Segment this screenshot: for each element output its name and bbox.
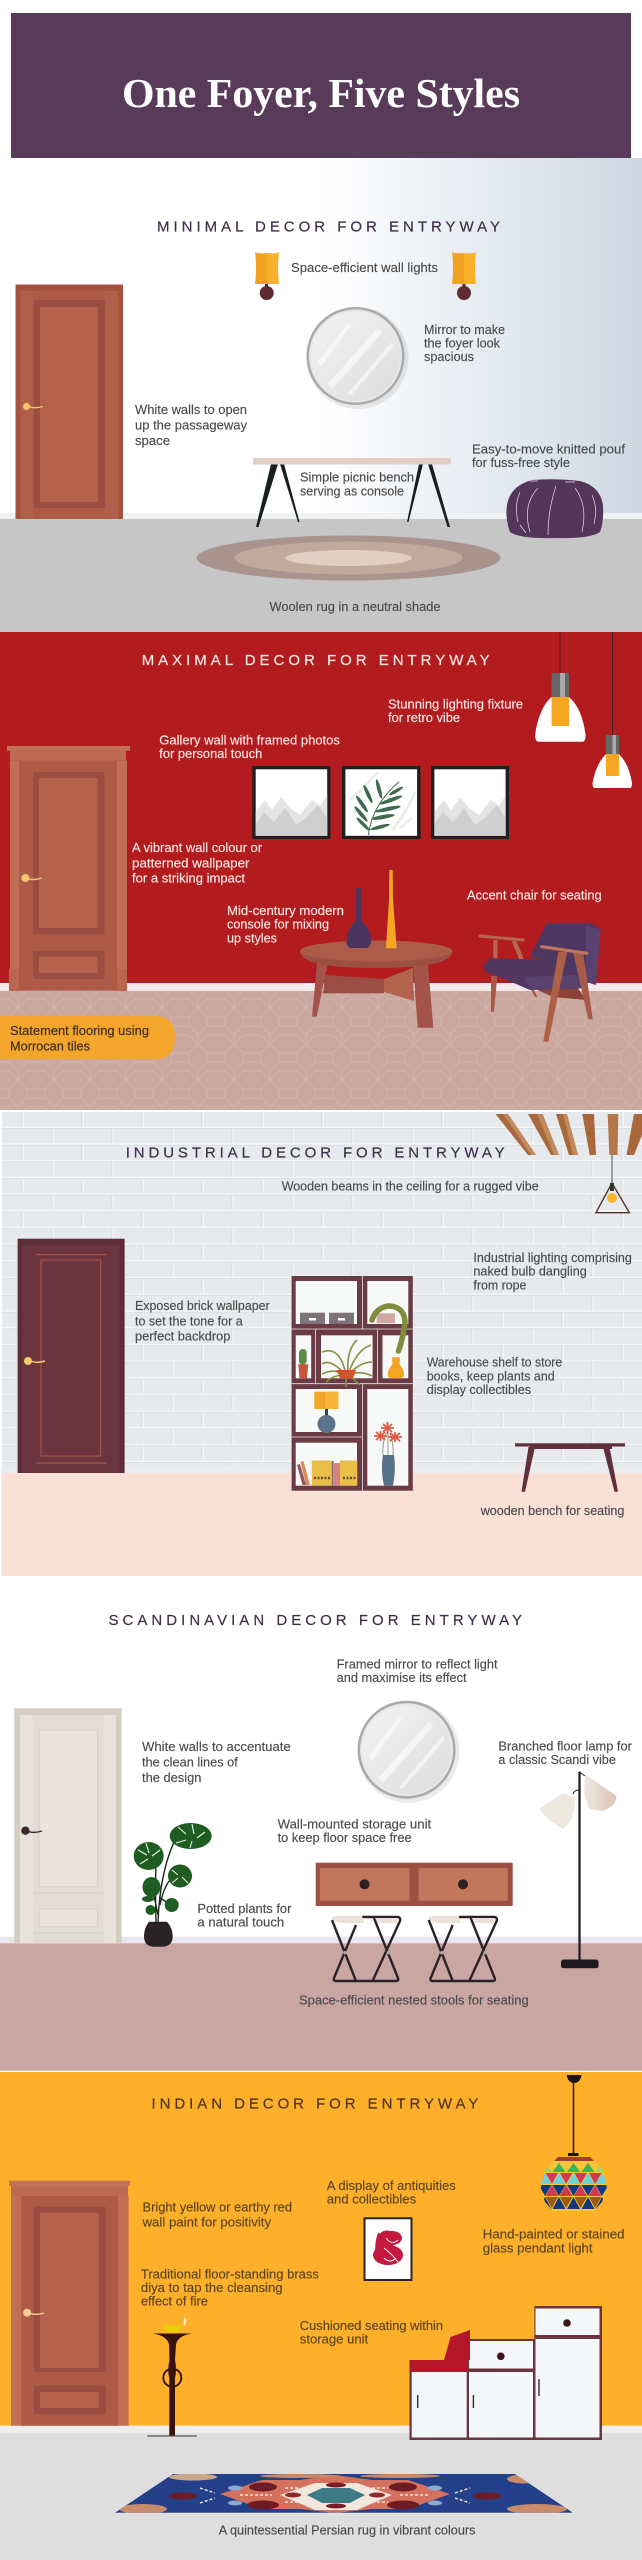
- text: industrial lighting: [473, 1250, 632, 1292]
- text: lighting: for retro vibe: [388, 710, 460, 725]
- indian wall and floor: [0, 2072, 642, 2560]
- text: industrial lighting: from rope: [473, 1277, 526, 1292]
- text: seating: [300, 2318, 443, 2347]
- table: mid-century console: [300, 940, 453, 1028]
- text: white walls: space: [135, 433, 170, 448]
- cushion: [410, 2330, 470, 2372]
- heading: maximal: MAXIMAL DECOR FOR ENTRYWAY: [142, 652, 490, 669]
- heading: indian: INDIAN DECOR FOR ENTRYWAY: [152, 2095, 478, 2112]
- callout: statement flooring: Statement flooring using: [10, 1023, 149, 1038]
- callout: statement flooring: [0, 1016, 175, 1059]
- text: pouf: Easy-to-move knitted pouf: [472, 442, 625, 456]
- heading: minimal: MINIMAL DECOR FOR ENTRYWAY: [157, 218, 500, 236]
- wooden bench: [515, 1443, 625, 1492]
- text: storage unit: to keep floor space free: [278, 1830, 412, 1845]
- orange vase: [388, 1357, 404, 1378]
- heading: scandinavian: SCANDINAVIAN DECOR FOR ENTRYWAY: [108, 1612, 522, 1629]
- floor lamp: [540, 1772, 616, 1968]
- text: white walls: White walls to open: [135, 402, 247, 417]
- text: warehouse shelf: Warehouse shelf to store: [427, 1355, 562, 1370]
- panel: indian decor: [0, 2072, 642, 2560]
- rug: neutral: [196, 536, 500, 580]
- chair: accent: [480, 923, 601, 1042]
- maximal wall and floor: [0, 632, 642, 1110]
- text: warehouse shelf: [427, 1355, 562, 1397]
- table lamp: [314, 1392, 338, 1433]
- gallery frame 2 with leaf: [342, 766, 420, 839]
- door: maximal: [7, 746, 130, 991]
- text: stools: Space-efficient nested stools for seating: [299, 1993, 529, 2008]
- text: potted plants: Potted plants for: [197, 1901, 292, 1916]
- text: potted plants: [197, 1901, 292, 1930]
- text: console: [227, 903, 344, 945]
- wooden beams: [496, 1114, 642, 1155]
- text: floor lamp: Branched floor lamp for: [498, 1738, 633, 1753]
- text: potted plants: a natural touch: [197, 1915, 284, 1930]
- warehouse shelf: [292, 1276, 413, 1491]
- text: lighting: Stunning lighting fixture: [388, 697, 523, 712]
- text: brass diya: diya to tap the cleansing: [141, 2280, 283, 2295]
- storage boxes: [300, 1313, 354, 1324]
- shelf frame: [292, 1276, 413, 1491]
- text: bench: wooden bench for seating: [480, 1503, 624, 1518]
- text: brass diya: [141, 2266, 319, 2308]
- text: mirror: the foyer look: [424, 336, 500, 350]
- text: white walls: [135, 402, 247, 448]
- text: warehouse shelf: display collectibles: [427, 1382, 532, 1397]
- bench: console: [253, 458, 451, 527]
- text: vibrant wall: A vibrant wall colour or: [132, 840, 263, 855]
- nested stool 1: [332, 1916, 400, 1981]
- spider plant: [322, 1340, 372, 1387]
- text: accent chair: Accent chair for seating: [467, 887, 602, 902]
- text: pouf: for fuss-free style: [472, 455, 570, 470]
- text: console: console for mixing: [227, 917, 329, 932]
- text: wall lights: Space-efficient wall lights: [291, 260, 438, 275]
- text: pendant: Hand-painted or stained: [483, 2227, 624, 2242]
- text: brass diya: effect of fire: [141, 2293, 208, 2308]
- icon: pendant light small: [592, 632, 632, 788]
- icon: right wall light: [452, 252, 476, 300]
- text: industrial lighting: Industrial lighting comprising: [473, 1250, 632, 1265]
- text: white walls: White walls to accentuate: [142, 1739, 291, 1754]
- text: persian rug: A quintessential Persian rug in vibrant colours: [219, 2523, 476, 2538]
- minimal wall and floor: [0, 158, 642, 632]
- cactus: [298, 1349, 308, 1378]
- gallery frame 3: [431, 766, 509, 839]
- books: [297, 1460, 357, 1486]
- text: bench: serving as console: [300, 484, 404, 498]
- text: vibrant wall: for a striking impact: [132, 871, 245, 886]
- text: rug: Woolen rug in a neutral shade: [270, 599, 440, 614]
- panel: minimal decor: [0, 158, 642, 632]
- icon: left wall light: [255, 252, 279, 300]
- text: lighting: [388, 697, 523, 725]
- framed ganesha artwork: [364, 2218, 412, 2280]
- text: industrial lighting: naked bulb dangling: [473, 1264, 587, 1279]
- icon: framed mirror: [358, 1701, 460, 1803]
- icon: dark vase: [346, 888, 371, 948]
- text: exposed brick: perfect backdrop: [135, 1329, 230, 1344]
- door: indian: [9, 2181, 130, 2426]
- scandinavian skirting and floor: [0, 1937, 642, 2071]
- icon: monstera plant: [134, 1823, 212, 1947]
- text: bench: [300, 470, 414, 498]
- text: white walls: the clean lines of: [142, 1755, 238, 1770]
- text: vibrant wall: patterned wallpaper: [132, 855, 250, 870]
- text: gallery wall: [159, 732, 340, 761]
- text: beams: Wooden beams in the ceiling for a rugged vibe: [282, 1179, 539, 1194]
- text: floor lamp: a classic Scandi vibe: [498, 1752, 616, 1767]
- storage cabinets: [410, 2306, 602, 2440]
- text: pendant: [483, 2227, 624, 2255]
- text: mirror: Mirror to make: [424, 322, 505, 337]
- text: exposed brick: to set the tone for a: [135, 1313, 243, 1328]
- callout: statement flooring: Morrocan tiles: [10, 1039, 90, 1054]
- text: framed mirror: [337, 1656, 498, 1685]
- text: wall paint: Bright yellow or earthy red: [142, 2199, 292, 2214]
- text: seating: Cushioned seating within: [300, 2318, 443, 2333]
- text: white walls: up the passageway: [135, 418, 247, 432]
- door: industrial: [18, 1239, 125, 1473]
- text: antiquities: [327, 2178, 456, 2207]
- text: antiquities: and collectibles: [327, 2192, 417, 2207]
- icon: brass diya stand: [147, 2317, 197, 2436]
- gallery frame 1: [252, 766, 330, 839]
- nested stool 2: [429, 1916, 497, 1981]
- text: wall paint: [141, 2199, 292, 2230]
- wall-mounted storage: [316, 1863, 513, 1906]
- text: exposed brick: Exposed brick wallpaper: [135, 1298, 270, 1313]
- text: vibrant wall: [132, 840, 263, 886]
- icon: pendant light large: [535, 632, 586, 742]
- text: pouf: [472, 442, 625, 470]
- text: white walls: [142, 1739, 291, 1785]
- door: minimal: [16, 284, 123, 519]
- text: wall paint: wall paint for positivity: [141, 2215, 272, 2230]
- icon: industrial bulb: [596, 1155, 629, 1213]
- icon: stained glass pendant: [538, 2075, 608, 2212]
- text: bench: Simple picnic bench: [300, 470, 414, 484]
- text: framed mirror: and maximise its effect: [337, 1670, 467, 1685]
- text: floor lamp: [498, 1738, 633, 1767]
- text: seating: storage unit: [300, 2332, 369, 2347]
- text: pendant: glass pendant light: [483, 2240, 593, 2255]
- text: exposed brick: [135, 1298, 270, 1344]
- persian rug: [115, 2474, 574, 2514]
- icon: knitted pouf: [506, 479, 603, 538]
- panel: industrial decor: [2, 1112, 642, 1576]
- door: scandinavian: [14, 1708, 122, 1943]
- text: storage unit: [278, 1816, 432, 1845]
- panel: scandinavian decor: [0, 1612, 642, 2071]
- panel: maximal decor: [0, 632, 642, 1110]
- text: white walls: the design: [142, 1770, 201, 1785]
- text: storage unit: Wall-mounted storage unit: [278, 1816, 432, 1831]
- title banner: One Foyer, Five Styles: [122, 70, 520, 116]
- flower vase: [374, 1422, 402, 1486]
- industrial wall and floor: [2, 1112, 642, 1576]
- storage unit with cushion seat: [410, 2306, 602, 2440]
- title banner: [11, 13, 631, 158]
- text: warehouse shelf: books, keep plants and: [427, 1368, 555, 1383]
- hanging plant: [372, 1306, 405, 1351]
- text: brass diya: Traditional floor-standing brass: [141, 2266, 319, 2281]
- text: gallery wall: for personal touch: [159, 746, 262, 761]
- icon: round mirror: [306, 307, 408, 409]
- icon: orange vase: [386, 870, 397, 948]
- text: gallery wall: Gallery wall with framed photos: [159, 732, 340, 747]
- text: antiquities: A display of antiquities: [327, 2178, 456, 2193]
- text: mirror: spacious: [424, 349, 474, 364]
- text: mirror: [424, 322, 505, 364]
- text: console: Mid-century modern: [227, 903, 344, 918]
- text: console: up styles: [227, 930, 277, 945]
- text: framed mirror: Framed mirror to reflect light: [337, 1656, 498, 1671]
- heading: industrial: INDUSTRIAL DECOR FOR ENTRYWAY: [126, 1144, 505, 1161]
